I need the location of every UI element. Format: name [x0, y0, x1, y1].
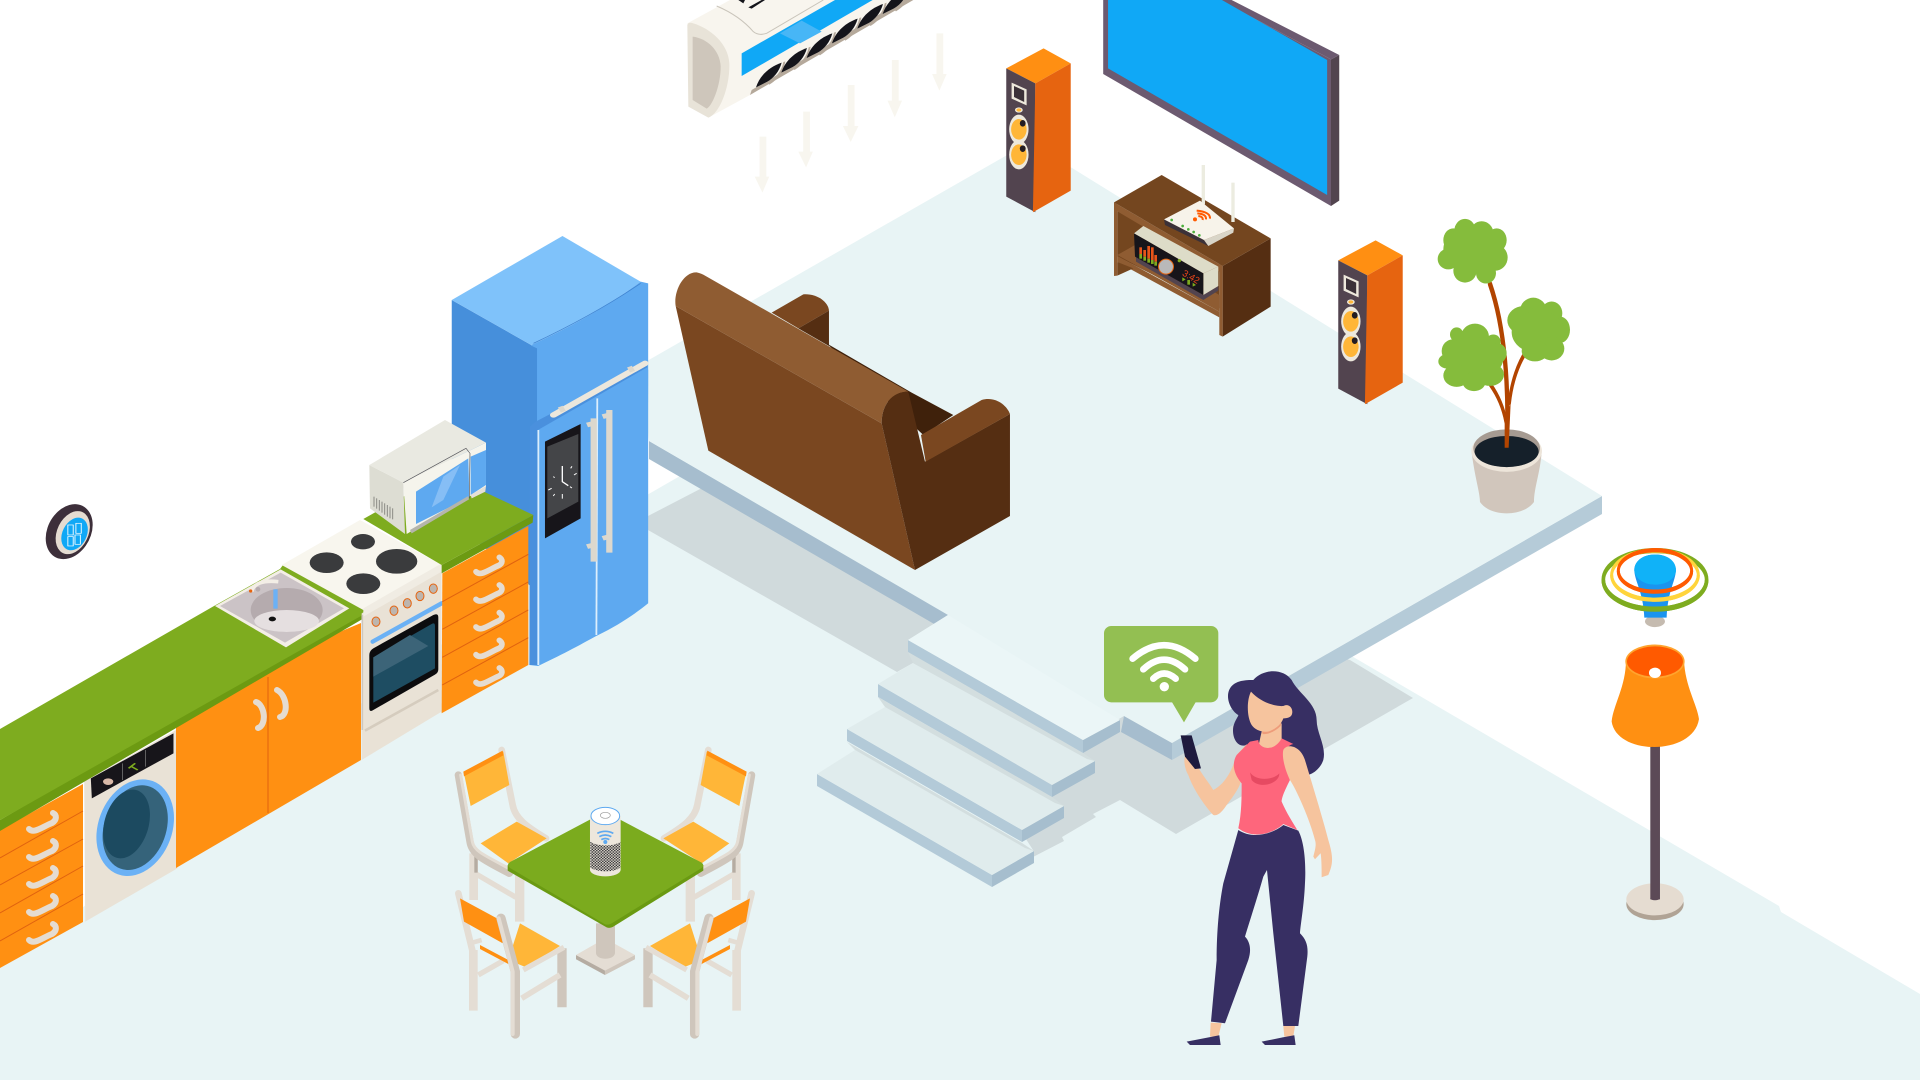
raised living room platform — [640, 142, 1602, 760]
right speaker — [1338, 240, 1403, 404]
table base — [576, 923, 635, 975]
right drawers — [442, 526, 528, 713]
back right chair — [663, 750, 752, 922]
countertop — [0, 607, 366, 831]
platform shadow — [648, 488, 1413, 857]
ankles and shoes — [1187, 1023, 1296, 1045]
top door handle — [554, 363, 645, 415]
wall thermostat — [38, 500, 100, 563]
lower floor — [0, 453, 1920, 1080]
left drawers — [0, 784, 83, 968]
face — [1248, 692, 1292, 732]
cabinet doors — [176, 623, 361, 868]
sink — [215, 569, 349, 647]
phone — [1181, 735, 1201, 769]
right arm — [1283, 746, 1332, 877]
wifi speech bubble — [1104, 626, 1218, 722]
microwave — [369, 420, 486, 534]
top — [1234, 738, 1297, 835]
neck — [1258, 723, 1282, 749]
refrigerator — [452, 236, 648, 666]
amplifier clock: 3:42 — [1181, 268, 1201, 286]
cold air arrows — [755, 33, 947, 193]
front left chair — [458, 893, 564, 1034]
woman with phone — [1181, 671, 1332, 1045]
left speaker — [1006, 48, 1071, 212]
potted plant — [1438, 219, 1570, 513]
front right chair — [646, 893, 752, 1034]
smart speaker — [590, 807, 621, 876]
left arm — [1184, 744, 1247, 815]
amplifier — [1134, 226, 1218, 300]
oven door — [369, 614, 438, 711]
pants — [1211, 825, 1308, 1026]
stove — [282, 520, 442, 760]
fridge smart display — [545, 424, 581, 538]
stairs — [817, 652, 1095, 887]
dining table set — [458, 750, 752, 1034]
washing machine — [84, 730, 183, 922]
hair — [1228, 671, 1324, 775]
smart bulb — [1603, 550, 1707, 627]
table top — [508, 812, 703, 928]
tv stand — [1114, 165, 1271, 337]
router — [1164, 165, 1235, 246]
right countertop — [363, 473, 533, 573]
air conditioner — [687, 0, 913, 118]
television — [1103, 0, 1339, 206]
side door handles — [587, 410, 609, 562]
floor lamp — [1612, 645, 1699, 920]
sofa — [675, 272, 1010, 570]
back left chair — [458, 750, 547, 922]
kitchen counter — [0, 473, 533, 968]
